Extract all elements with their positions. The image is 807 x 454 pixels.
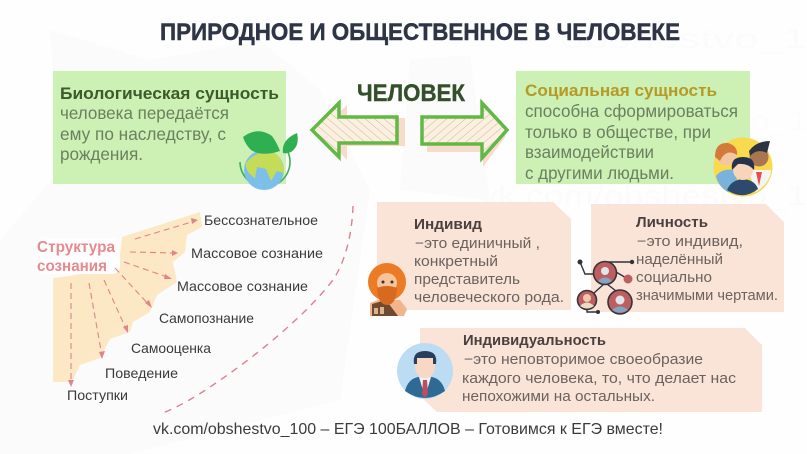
panel: biological essence: ему по наследству, с [60, 124, 226, 144]
fan items: Бессознательное [204, 212, 318, 228]
panel: social essence: только в обществе, при [525, 122, 711, 142]
panel: individual: человеческого рода. [414, 290, 564, 306]
panel: individuality: −это неповторимое своеобразие [464, 352, 703, 368]
panel: individual: Индивид [414, 217, 482, 233]
panel: social essence [516, 71, 750, 184]
panel: social essence: Социальная сущность [525, 81, 717, 100]
panel: individuality: непохожими на остальных. [462, 389, 655, 405]
fan label: сознания [37, 258, 107, 275]
panel: individuality: Индивидуальность [463, 333, 606, 349]
diagram: structure of consciousness [34, 212, 327, 403]
fan label [34, 238, 120, 275]
panel: biological essence [53, 71, 286, 184]
panel: biological essence: человека передаётся [60, 103, 229, 123]
icon: caveman [368, 263, 407, 316]
panel: individual [377, 202, 571, 310]
panel: social essence: способна сформироваться [525, 101, 738, 121]
panel: personality: −это индивид, [637, 234, 743, 250]
panel: biological essence: рождения. [60, 144, 143, 164]
panel: individuality [420, 328, 762, 412]
text: vk.com/obshestvo_1 [500, 105, 807, 136]
icon: group of people [714, 138, 772, 196]
arrow: right [422, 103, 507, 167]
dashed curve [163, 206, 353, 413]
arrow: left [312, 103, 405, 160]
text: vk.com/obshestvo_1 [480, 180, 807, 211]
fan items: Массовое сознание [191, 245, 323, 261]
panel: personality: Личность [636, 215, 708, 231]
icon: earth with leaves [240, 131, 298, 190]
panel: individual: −это единичный , [415, 236, 540, 252]
fan items: Поступки [67, 387, 128, 403]
fan items: Массовое сознание [177, 278, 308, 294]
dashed fan arrows [71, 221, 195, 384]
heading: person: ЧЕЛОВЕК [357, 80, 465, 107]
panel: personality: наделённый [636, 252, 723, 268]
panel: individual: представитель [414, 272, 520, 288]
icon: social network [578, 260, 634, 314]
panel: social essence: с другими людьми. [525, 163, 674, 183]
panel: personality [591, 204, 784, 312]
panel: personality: социально [636, 270, 712, 286]
text: obshestvo_1 [560, 23, 807, 54]
fan background [53, 212, 202, 382]
panel: social essence: взаимодействии [525, 142, 654, 162]
panel: individual: конкретный [414, 254, 498, 270]
footer text: vk.com/obshestvo_100 – ЕГЭ 100БАЛЛОВ – Готовимся к ЕГЭ вместе! [153, 421, 663, 438]
fan label: Структура [37, 239, 115, 256]
panel: individuality: каждого человека, то, что делает нас [462, 371, 736, 387]
fan items: Самооценка [131, 340, 211, 356]
fan items: Поведение [105, 365, 178, 381]
panel: biological essence: Биологическая сущность [60, 84, 279, 103]
fan items: Самопознание [159, 310, 254, 326]
title: ПРИРОДНОЕ И ОБЩЕСТВЕННОЕ В ЧЕЛОВЕКЕ [160, 19, 680, 46]
icon: businessman [397, 343, 453, 399]
panel: personality: значимыми чертами. [636, 288, 778, 304]
